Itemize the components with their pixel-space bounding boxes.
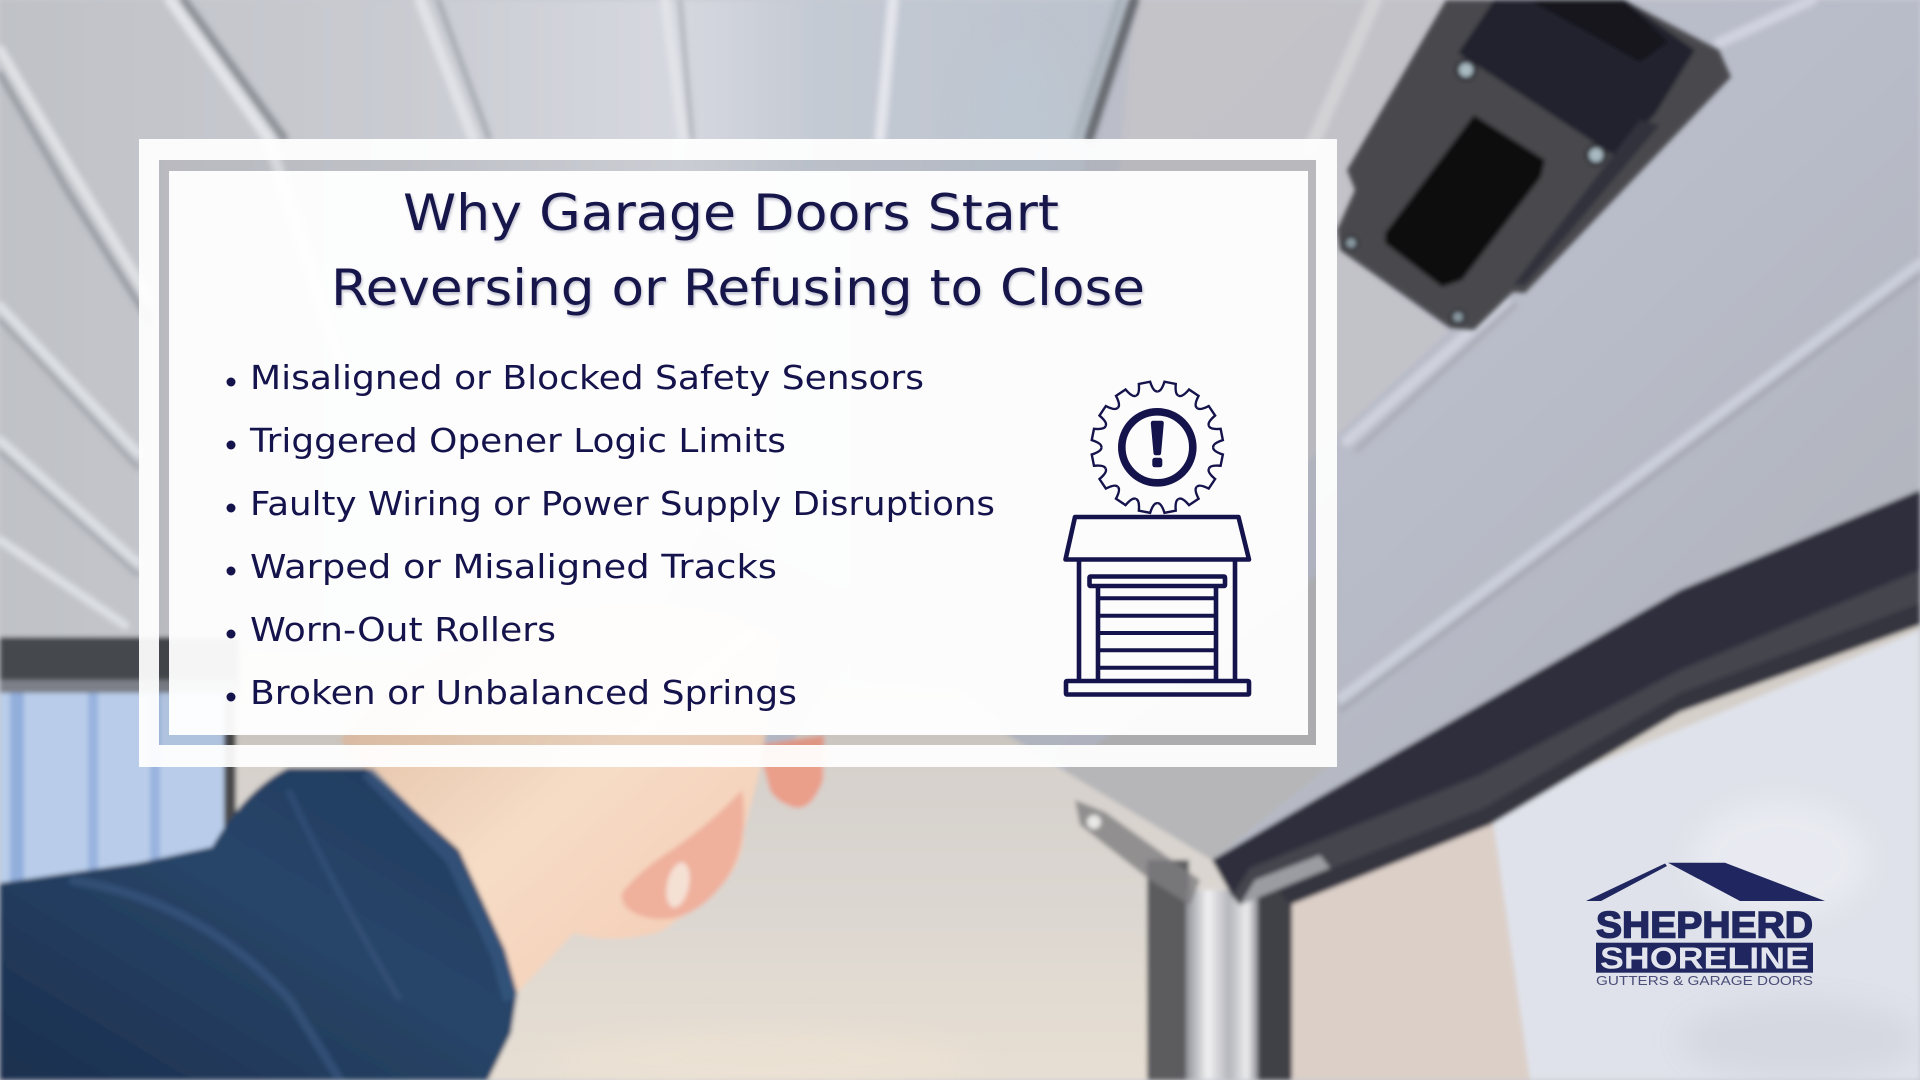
- dark strip left: [0, 637, 240, 680]
- list of causes: [226, 358, 995, 712]
- door opener bracket: [1337, 0, 1731, 330]
- title: [331, 184, 1145, 317]
- logo: Shepherd Shoreline: [1586, 863, 1825, 988]
- bracket hinge at corner: [1075, 800, 1200, 905]
- item 6: Broken or Unbalanced Springs: [250, 673, 797, 712]
- icon: garage building: [1066, 517, 1249, 694]
- item 5: Worn-Out Rollers: [250, 610, 556, 649]
- title: Why Garage Doors Start: [403, 184, 1059, 242]
- blue window: [0, 693, 236, 900]
- logo roof: [1586, 863, 1825, 901]
- item 4: Warped or Misaligned Tracks: [250, 547, 777, 586]
- soft tone patches: [540, 40, 1920, 1080]
- title: Reversing or Refusing to Close: [331, 259, 1145, 317]
- panel outer white frame: [139, 139, 1337, 767]
- logo banner: SHORELINE: [1600, 940, 1809, 975]
- door panel grooves: [0, 0, 1920, 710]
- panel grey border: [159, 160, 1316, 745]
- door warm tone near bracket: [1100, 0, 1460, 470]
- sleeve: [0, 768, 517, 1080]
- lower door tone: [1063, 560, 1337, 860]
- bright outside area: [1485, 630, 1920, 1080]
- thumb: [622, 790, 744, 919]
- hand holding remote: [0, 525, 875, 1080]
- panel inner white: [169, 171, 1308, 735]
- door bottom beam: [1212, 490, 1920, 905]
- garage door panels: [0, 0, 1134, 770]
- vertical door rail: [1147, 860, 1292, 1080]
- wall section beside rail: [1285, 800, 1530, 1080]
- icon: garage with warning gear: [1066, 381, 1249, 694]
- logo tagline: GUTTERS & GARAGE DOORS: [1596, 974, 1813, 988]
- item 2: Triggered Opener Logic Limits: [249, 421, 786, 460]
- interior wall: [0, 620, 1920, 1080]
- panel: translucent white card: [139, 139, 1337, 767]
- logo name: SHEPHERD: [1596, 904, 1813, 945]
- item 1: Misaligned or Blocked Safety Sensors: [250, 358, 924, 397]
- icon: warning gear: [1091, 381, 1224, 514]
- item 3: Faulty Wiring or Power Supply Disruptions: [250, 484, 995, 523]
